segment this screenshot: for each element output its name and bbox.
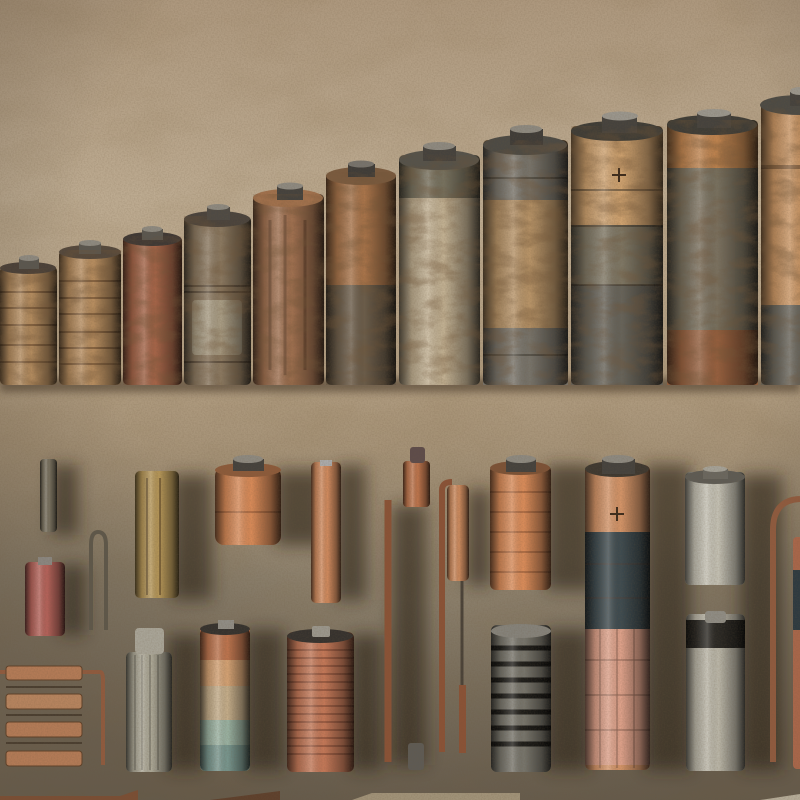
cast shadows [52, 465, 782, 770]
battery 7 [399, 142, 480, 385]
small copper cell [403, 447, 430, 507]
copper cylinder [311, 460, 341, 603]
bent copper wire [773, 499, 800, 762]
silver black-top cell [686, 611, 745, 771]
rust texture on top row [0, 113, 800, 385]
small grey rod [40, 459, 57, 532]
tall multi-colour cell [585, 455, 650, 770]
plus mark [612, 168, 626, 182]
bottom row parts [0, 447, 800, 800]
battery 9 [571, 112, 663, 385]
battery 11 [760, 87, 800, 385]
right edge copper cell [793, 537, 800, 769]
wire and copper tube [442, 482, 469, 753]
heat coil rack [0, 666, 103, 766]
plus mark [610, 507, 624, 521]
bottom edge tools [0, 790, 800, 800]
small rod base [408, 743, 424, 770]
ribbed grey cell [126, 628, 172, 772]
top row of aged batteries [0, 87, 800, 385]
banded teal cell [200, 620, 250, 771]
clip wire [91, 532, 106, 630]
battery 5 [253, 182, 324, 385]
ribbed black cell [491, 624, 551, 772]
small red cell [25, 557, 65, 636]
squat copper cell [215, 455, 281, 545]
battery 3 [123, 226, 182, 385]
thin copper rod [384, 500, 392, 762]
shadow band under top row [0, 378, 800, 392]
wide copper striped cell [287, 626, 354, 772]
battery 10 [667, 109, 758, 385]
battery 8 [483, 125, 568, 385]
battery 1 [0, 255, 57, 385]
banded copper cell [490, 455, 551, 590]
silver cell [685, 466, 745, 585]
battery 2 [59, 240, 121, 385]
battery 4 [184, 204, 251, 385]
tall brass cell [135, 471, 179, 598]
battery 6 [326, 160, 396, 385]
